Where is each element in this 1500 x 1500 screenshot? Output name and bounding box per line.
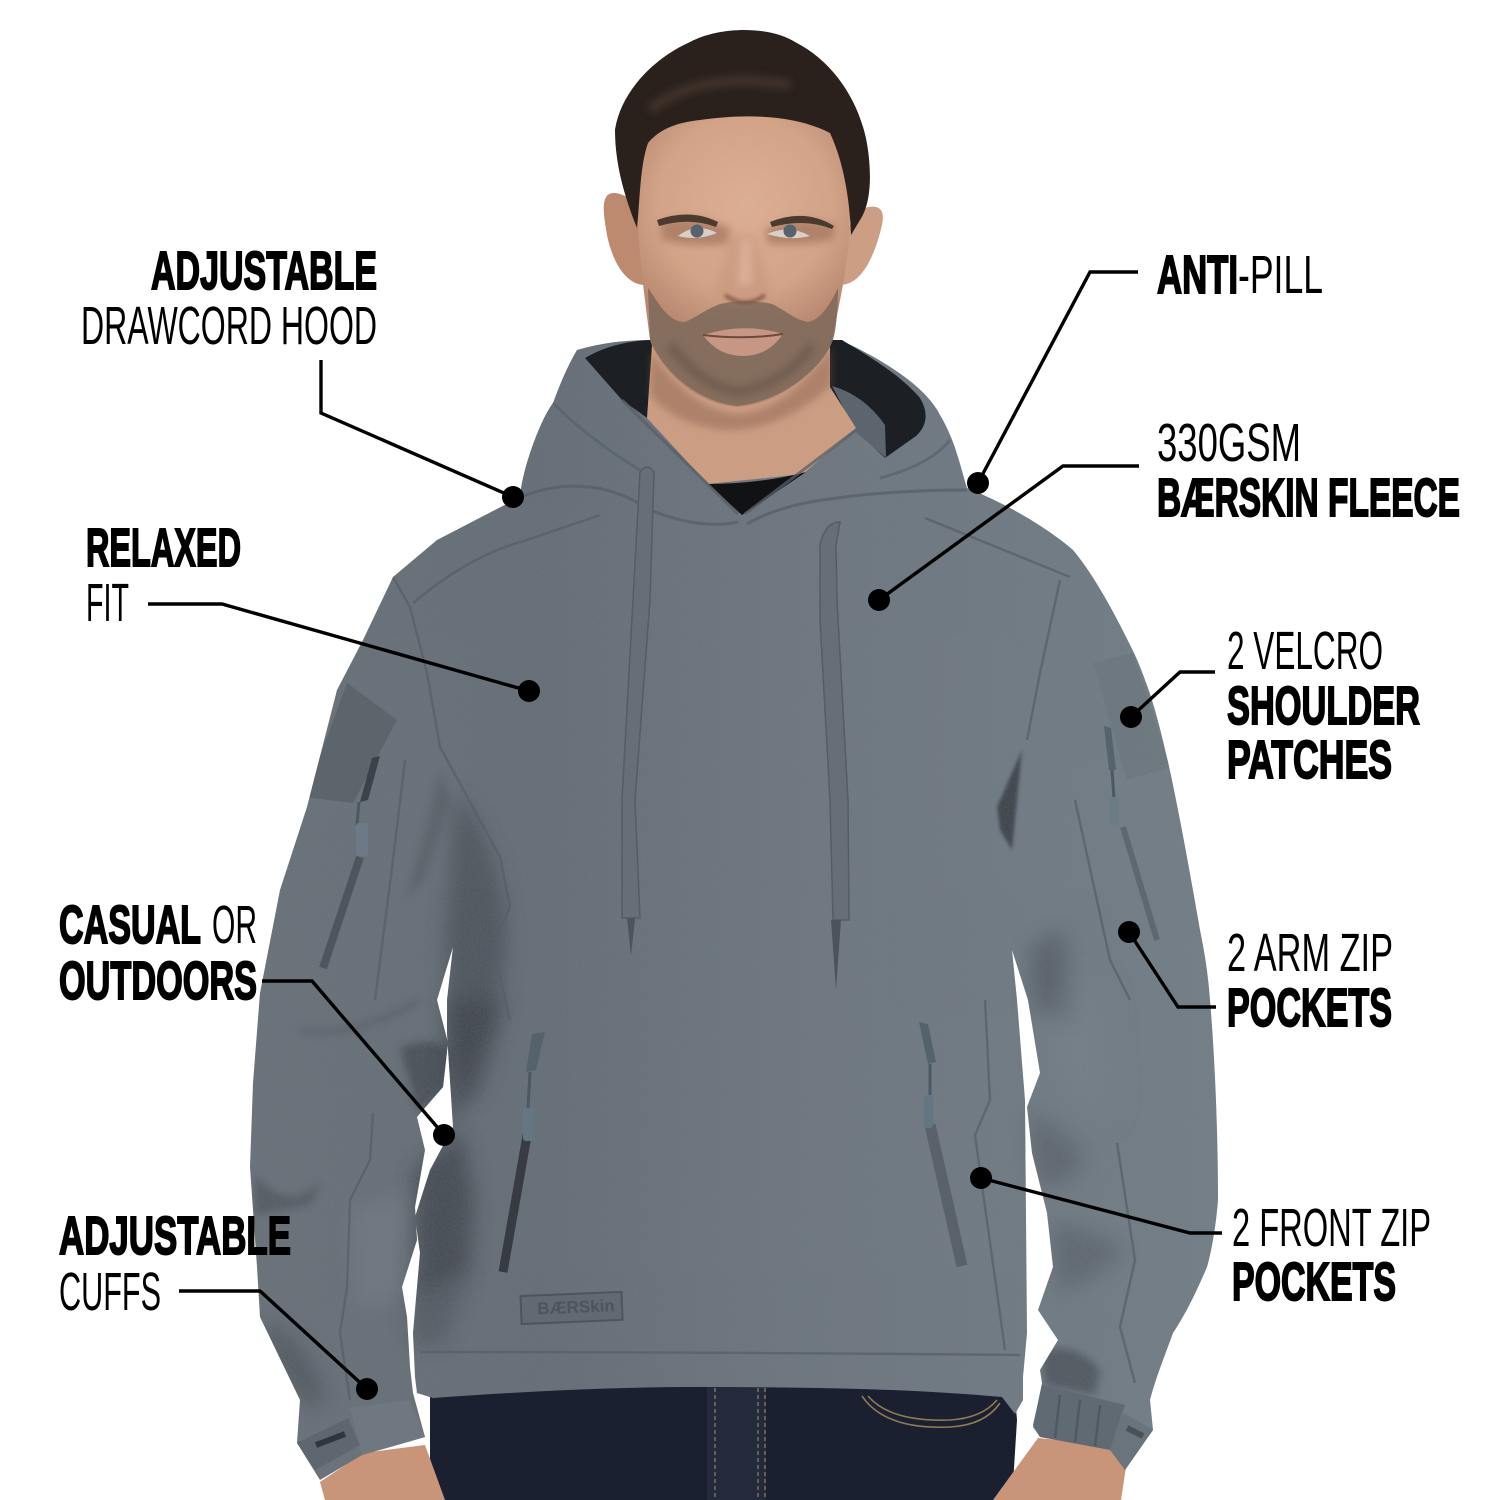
callout: relaxed fit: [86, 518, 540, 702]
callout: adjustable cuffs: [59, 1206, 378, 1400]
callout: adjustable drawcord hood: DRAWCORD HOOD: [81, 296, 377, 356]
eye shadows: [660, 218, 836, 245]
fleece texture: [408, 768, 1083, 1380]
left hand: [320, 1445, 445, 1500]
left shoulder patch: [305, 683, 397, 803]
beard stubble: [648, 288, 838, 406]
right drawcord: [820, 522, 849, 990]
left cuff: [350, 1400, 425, 1455]
jeans: [430, 1385, 1017, 1500]
callout: anti-pill: [967, 245, 1323, 494]
callout: adjustable drawcord hood: ADJUSTABLE: [151, 241, 377, 301]
neck: [647, 340, 856, 484]
callout: velcro shoulder patches: 2 VELCRO: [1227, 621, 1383, 681]
left drawcord: [622, 467, 654, 956]
right cuff strap: [1110, 1412, 1153, 1470]
callout: velcro shoulder patches: [1120, 621, 1420, 790]
hair: [615, 30, 870, 235]
callout: arm zip pockets: 2 ARM ZIP: [1227, 923, 1393, 983]
hood lining: [585, 340, 926, 458]
man wearing grey fleece hoodie: [240, 30, 1230, 1500]
callout: casual or outdoors: CASUAL: [59, 895, 201, 955]
eyes: [678, 228, 717, 238]
callout: arm zip pockets: POCKETS: [1227, 978, 1392, 1038]
callout: front zip pockets: POCKETS: [1232, 1252, 1396, 1312]
callout: anti-pill: -PILL: [1238, 245, 1323, 305]
right ear: [840, 207, 883, 285]
eyebrows: [657, 214, 718, 227]
fold shading: [240, 340, 1230, 1490]
callout: adjustable cuffs: CUFFS: [59, 1262, 161, 1322]
callout: front zip pockets: [970, 1167, 1431, 1312]
seams: [340, 515, 1135, 1400]
logo patch: BÆRSkin: [537, 1296, 615, 1318]
hoodie silhouette: [250, 340, 1218, 1480]
callout: relaxed fit: RELAXED: [86, 518, 241, 578]
callout: casual or outdoors: [59, 895, 455, 1146]
hood inner fold: [832, 386, 886, 458]
hood flap folds: [520, 400, 967, 524]
callout: adjustable cuffs: ADJUSTABLE: [59, 1206, 291, 1266]
lighter fabric highlights: [350, 980, 1110, 1310]
callout: 330gsm fleece: 330GSM: [1157, 413, 1301, 473]
t-shirt collar: [708, 472, 806, 515]
callout: anti-pill: ANTI: [1157, 245, 1238, 305]
callout: adjustable drawcord hood: [81, 241, 524, 508]
right hand: [993, 1438, 1126, 1500]
callout: casual or outdoors: OR: [212, 895, 257, 955]
callout: velcro shoulder patches: PATCHES: [1227, 730, 1392, 790]
logo patch: [520, 1292, 623, 1324]
nose: [715, 235, 770, 305]
left ear: [604, 193, 645, 285]
arm and front zip pockets: [323, 726, 1157, 1272]
hood rim seam: [553, 403, 950, 478]
callout: casual or outdoors: OUTDOORS: [59, 951, 257, 1011]
right cuff: [1033, 1385, 1125, 1450]
callout: 330gsm fleece: [868, 413, 1460, 611]
callout: relaxed fit: FIT: [86, 573, 129, 633]
right shoulder patch: [1166, 756, 1170, 768]
mouth: [703, 328, 783, 356]
callout: arm zip pockets: [1118, 921, 1393, 1038]
face: [638, 95, 850, 407]
neck shadow: [650, 345, 832, 430]
left cuff strap: [297, 1418, 360, 1470]
